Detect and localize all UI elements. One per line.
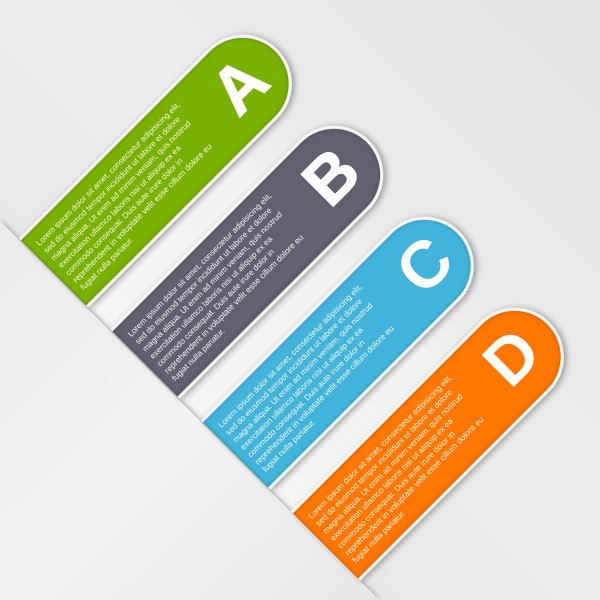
text B: exercitation ullamco laboris nisi ut aliquip ex ea [148, 234, 275, 361]
strip A rim [19, 15, 312, 308]
text C: fugiat nulla pariatur. [261, 417, 317, 474]
strip B rim [110, 106, 403, 399]
panel: A [19, 15, 312, 308]
text A: exercitation ullamco laboris nisi ut aliquip ex ea [57, 143, 183, 270]
text D: reprehenderit in voluptate velit esse cillum dolore eu [343, 414, 486, 557]
strip C rim [201, 197, 494, 490]
letter B: B [288, 133, 374, 219]
text B: reprehenderit in voluptate velit esse cillum dolore eu [162, 232, 306, 375]
text C: Lorem ipsum dolor sit amet, consectetur adipisicing elit, [217, 282, 364, 430]
text D: commodo consequat. Duis aute irure dolor in [336, 429, 457, 550]
text C: sed do eiusmod tempor incididunt ut labore et dolore [224, 297, 364, 437]
text D: exercitation ullamco laboris nisi ut aliquip ex ea [329, 416, 455, 543]
text A: Lorem ipsum dolor sit amet, consectetur adipisicing elit, [35, 100, 182, 248]
strip B body [112, 110, 399, 397]
text B: sed do eiusmod tempor incididunt ut labore et dolore [133, 206, 274, 346]
text D: fugiat nulla pariatur. [351, 508, 407, 565]
text C: commodo consequat. Duis aute irure dolor in [246, 338, 367, 459]
text A: reprehenderit in voluptate velit esse cillum dolore eu [71, 141, 214, 284]
panel: B [110, 106, 403, 399]
text D: sed do eiusmod tempor incididunt ut labore et dolore [314, 388, 454, 528]
text A: commodo consequat. Duis aute irure dolor in [64, 156, 185, 277]
strip D rim [291, 288, 584, 581]
text A: magna aliqua. Ut enim ad minim veniam, quis nostrud [49, 119, 193, 262]
letter A: A [196, 42, 282, 128]
text B: Lorem ipsum dolor sit amet, consectetur adipisicing elit, [126, 191, 274, 339]
text C: exercitation ullamco laboris nisi ut aliquip ex ea [239, 325, 365, 452]
folded sheet lower left [0, 221, 379, 600]
light bands between strips [87, 116, 485, 514]
text B: commodo consequat. Duis aute irure dolor in [155, 247, 276, 368]
text C: magna aliqua. Ut enim ad minim veniam, quis nostrud [231, 301, 375, 444]
letter D: D [468, 314, 554, 400]
text C: reprehenderit in voluptate velit esse cillum dolore eu [253, 323, 396, 466]
text D: magna aliqua. Ut enim ad minim veniam, quis nostrud [321, 392, 465, 535]
text B: fugiat nulla pariatur. [170, 326, 227, 383]
text A: fugiat nulla pariatur. [79, 235, 135, 292]
strip C body [203, 201, 490, 488]
panel: C [201, 197, 494, 490]
text D: Lorem ipsum dolor sit amet, consectetur adipisicing elit, [307, 373, 454, 521]
strip A body [21, 19, 308, 306]
panel: D [291, 288, 584, 581]
text B: magna aliqua. Ut enim ad minim veniam, quis nostrud [141, 210, 284, 353]
strip D body [293, 292, 580, 579]
text A: sed do eiusmod tempor incididunt ut labore et dolore [42, 115, 182, 255]
letter C: C [381, 222, 467, 308]
